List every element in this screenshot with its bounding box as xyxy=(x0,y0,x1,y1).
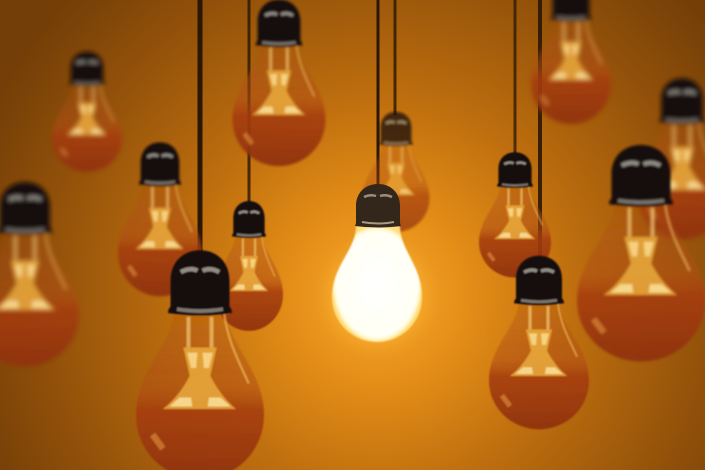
bulb: far right large xyxy=(577,145,705,362)
bulb: top far left xyxy=(52,52,122,172)
bulb: center-left small xyxy=(215,201,283,331)
lit bulb xyxy=(311,184,443,362)
bulb: far right back xyxy=(637,78,705,240)
bulb: top center-left xyxy=(232,0,326,166)
cords xyxy=(23,0,682,260)
bulb: front lower left xyxy=(136,250,264,470)
bulb: right of lit bulb small xyxy=(479,152,551,278)
bulb: top right xyxy=(531,0,611,124)
bulb: left middle xyxy=(118,142,202,296)
bulb: behind the lit bulb xyxy=(362,112,430,232)
bulb: lower right xyxy=(489,256,589,429)
bulb: far left large xyxy=(0,182,79,367)
